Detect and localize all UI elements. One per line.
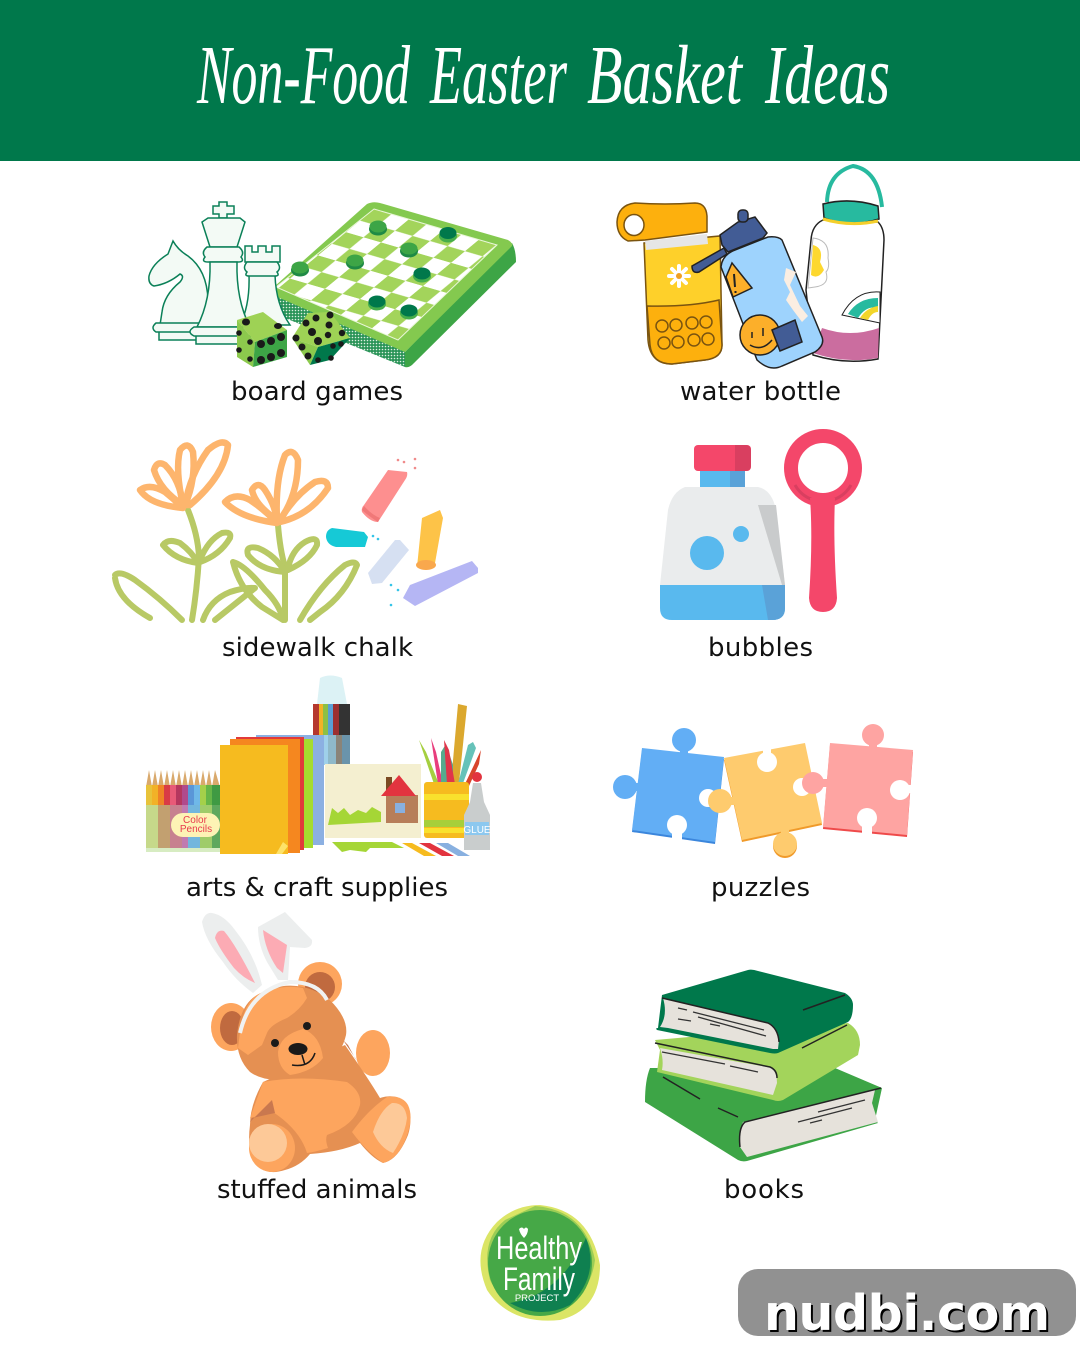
watermark badge: nudbi.com: [766, 1287, 1052, 1344]
glue bottle: [463, 772, 491, 850]
top book: [656, 970, 853, 1054]
illustration: bubbles: [660, 436, 855, 620]
illustration: puzzles: [613, 724, 916, 858]
house picture: [325, 764, 421, 838]
logo: Healthy Family Project: Family: [503, 1261, 575, 1297]
pink puzzle piece: [802, 724, 916, 838]
paper stack: [220, 735, 324, 854]
bubble wand: [791, 436, 855, 612]
illustration: water bottles: [617, 166, 884, 368]
illustration: stack of books: [645, 970, 882, 1161]
label: board games: board games: [231, 377, 403, 407]
label: sidewalk chalk: sidewalk chalk: [222, 633, 413, 663]
title: Non-Food: [196, 29, 411, 122]
pencil pot: [419, 704, 481, 838]
logo: Healthy Family Project: [480, 1205, 600, 1321]
illustration: arts and craft supplies: [146, 676, 491, 856]
bubble bottle: [660, 445, 785, 620]
watermark badge: nudbi.com: [764, 1285, 1050, 1342]
paper scraps: [332, 842, 470, 856]
illustration: board games: [149, 202, 516, 367]
bunny ears: [202, 912, 312, 993]
colour pencils: [146, 770, 220, 852]
watermark badge: [738, 1269, 1076, 1344]
blue puzzle piece: [613, 728, 726, 844]
label: bubbles: bubbles: [708, 633, 813, 663]
checkerboard: [275, 202, 516, 367]
logo: Healthy Family Project: PROJECT: [515, 1293, 559, 1304]
chalk flowers: [115, 442, 357, 620]
blue bottle: [692, 210, 823, 368]
title: Ideas: [764, 29, 890, 122]
glue bottle: GLUE: [463, 825, 491, 836]
label: stuffed animals: stuffed animals: [217, 1175, 417, 1205]
illustration: sidewalk chalk: [115, 442, 478, 620]
dice: [236, 312, 350, 367]
colour pencils: Pencils: [180, 824, 212, 835]
chess pieces: [149, 202, 290, 344]
logo: Healthy Family Project: Healthy: [496, 1230, 582, 1266]
label: arts and craft supplies: arts & craft supplies: [186, 873, 448, 903]
yellow puzzle piece: [708, 743, 822, 858]
label: puzzles: puzzles: [711, 873, 810, 903]
chalk sticks: [326, 458, 478, 606]
colour pencils: Color: [183, 815, 208, 826]
title: Basket: [587, 29, 744, 122]
label: books: books: [724, 1175, 804, 1205]
label: water bottle: water bottle: [680, 377, 841, 407]
illustration: stuffed bear with bunny ears: [202, 912, 411, 1172]
teddy bear: [211, 962, 411, 1172]
header band: [0, 0, 1080, 161]
white bottle: [806, 166, 884, 361]
middle book: [655, 1023, 860, 1101]
marker cup: [313, 676, 350, 765]
bottom book: [645, 1068, 882, 1161]
title: Easter: [429, 29, 567, 122]
yellow bottle: [617, 203, 722, 364]
